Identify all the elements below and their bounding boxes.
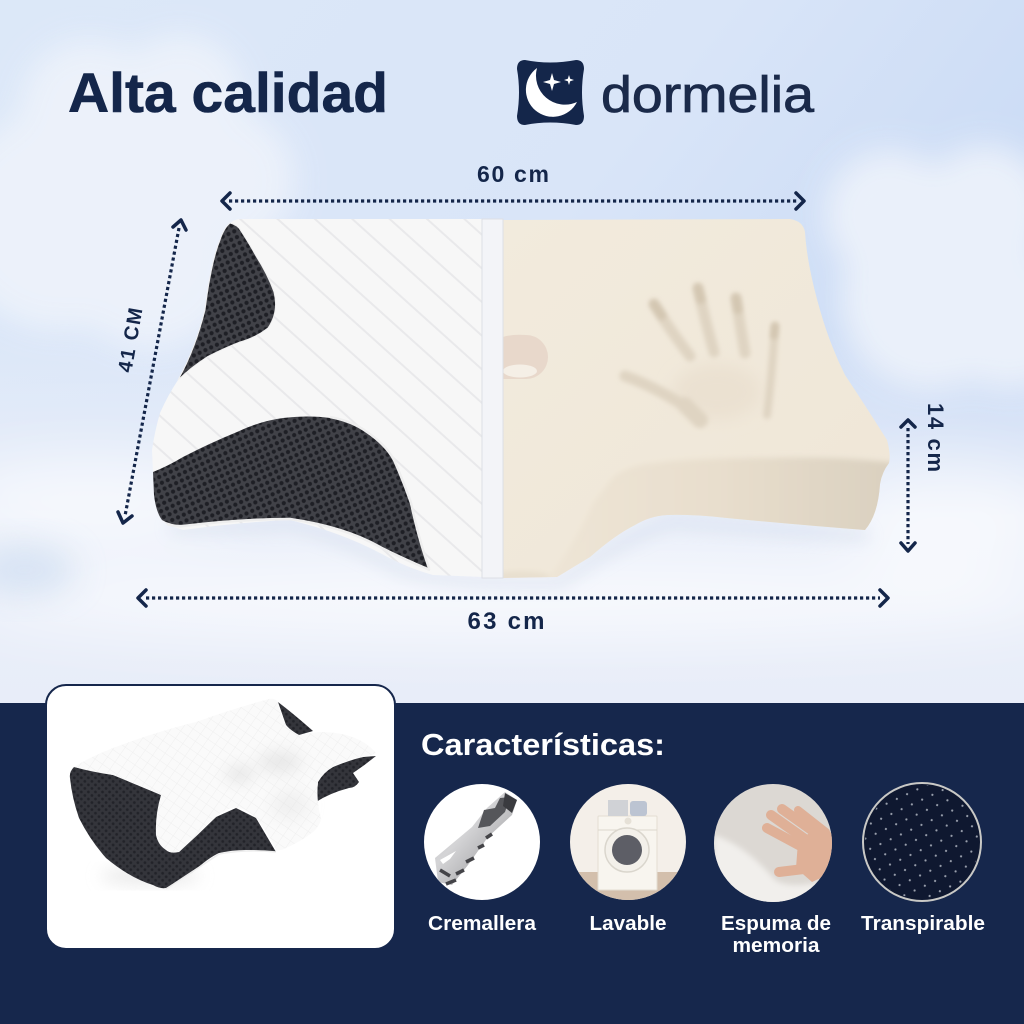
feature: cremallera: Cremallera — [428, 913, 537, 935]
dimension: 14 cm height: 14 cm — [923, 403, 948, 472]
feature: lavable — [570, 784, 686, 935]
mesh panel: lower — [153, 416, 428, 568]
icon: hand on foam — [714, 784, 834, 910]
dimension: 63 cm width: 63 cm — [468, 608, 544, 635]
wordmark: dormelia — [601, 66, 815, 123]
feature: espuma de memoria: memoria — [732, 935, 820, 957]
hole in foam — [503, 335, 548, 379]
zipper strip — [482, 219, 503, 578]
mesh left side — [70, 767, 276, 888]
pillow right half: memory foam — [490, 219, 895, 590]
dimension: 60 cm width: 60 cm — [477, 161, 549, 187]
mesh top right — [278, 702, 313, 735]
dimension: 41 cm depth — [115, 220, 186, 523]
icon: perforated fabric — [863, 783, 981, 901]
feature: lavable: Lavable — [590, 913, 666, 935]
icon: zipper — [424, 784, 540, 900]
icon: washing machine — [570, 784, 686, 902]
dimension: 63 cm width — [138, 590, 888, 635]
pillow left half: quilted cover — [152, 219, 484, 577]
pillow photo — [70, 699, 376, 889]
quilted top surface — [74, 699, 376, 853]
feature: espuma de memoria — [714, 784, 834, 957]
foam side band near strap — [504, 573, 545, 578]
footer band — [0, 703, 1024, 1024]
surface shading — [226, 752, 308, 819]
feature: espuma de memoria: Espuma de — [721, 913, 831, 935]
heading: características: Características: — [421, 727, 665, 762]
hand imprint — [625, 288, 775, 420]
dimension: 14 cm height — [901, 403, 948, 551]
dimension: 60 cm width — [222, 161, 804, 209]
panel: product photo — [46, 685, 395, 949]
pillow shadow — [170, 522, 868, 583]
mesh panel: upper left — [178, 223, 276, 380]
mesh right side — [316, 756, 376, 802]
title: Alta calidad — [68, 61, 388, 124]
feature: cremallera — [424, 784, 540, 935]
sky background with clouds — [0, 0, 1024, 704]
feature: transpirable: Transpirable — [861, 913, 985, 935]
mesh piping — [167, 417, 430, 570]
foam front face shading — [557, 457, 889, 577]
dimension: 41 cm depth: 41 CM — [115, 306, 147, 374]
logo: dormelia — [517, 60, 815, 125]
feature: transpirable — [861, 783, 985, 935]
icon: moon and stars badge — [517, 60, 584, 125]
pillow main: cover half and foam half — [152, 219, 895, 590]
